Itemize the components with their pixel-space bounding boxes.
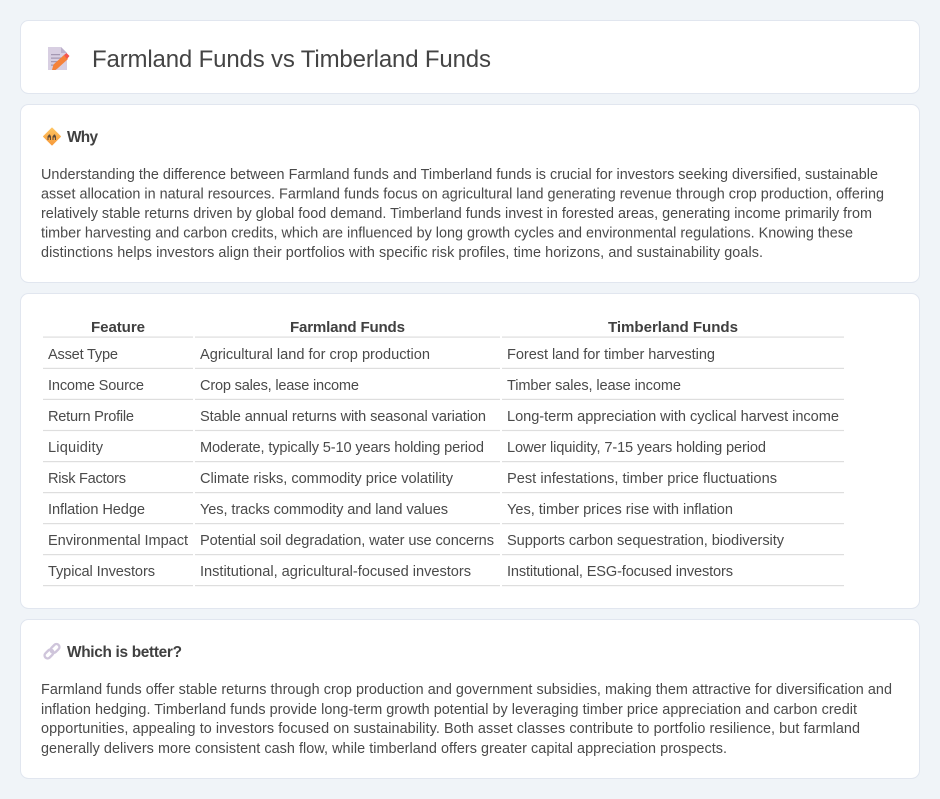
text block: which is better paragraph xyxy=(41,682,892,757)
table row: typical investors: Institutional, agricultural-focused investors xyxy=(200,564,471,580)
table row: return profile: Stable annual returns with seasonal variation xyxy=(200,409,486,425)
text block: why paragraph: Understanding the difference between Farmland funds and Timberland funds is crucial for investors seeking diversified, sustainable xyxy=(41,167,878,183)
table row: typical investors: Institutional, ESG-focused investors xyxy=(507,564,733,580)
text block: which is better paragraph: opportunities, appealing to investors focused on sustainability. Both asset classes contribute to portfolio resilience, but farmland xyxy=(41,721,860,737)
table row: liquidity: Lower liquidity, 7-15 years holding period xyxy=(507,440,766,456)
text block: why paragraph xyxy=(41,167,884,261)
table row: inflation hedge: Yes, timber prices rise with inflation xyxy=(507,502,733,518)
table row: income source xyxy=(43,378,844,400)
table row: asset type xyxy=(43,347,844,369)
table row: environmental impact: Supports carbon sequestration, biodiversity xyxy=(507,533,785,549)
table row: income source: Crop sales, lease income xyxy=(200,378,359,394)
panel: title header xyxy=(20,20,920,94)
text block: why paragraph: distinctions helps investors align their portfolios with specific risk profiles, time horizons, and sustainability goals. xyxy=(41,245,763,261)
table row: risk factors: Climate risks, commodity price volatility xyxy=(200,471,454,487)
text block: which is better paragraph: generally delivers more consistent cash flow, while timberland offers greater capital appreciation prospects. xyxy=(41,741,727,757)
heading: which is better: Which is better? xyxy=(67,644,182,661)
table row: typical investors xyxy=(43,564,844,586)
table row: return profile: Long-term appreciation with cyclical harvest income xyxy=(507,409,839,425)
table row: typical investors: Typical Investors xyxy=(48,564,155,580)
title: Farmland Funds vs Timberland Funds xyxy=(92,46,491,73)
icon: memo with pencil xyxy=(48,47,70,70)
panel: comparison table xyxy=(20,294,920,608)
table header row: Timberland Funds xyxy=(608,319,738,336)
table row: return profile xyxy=(43,409,844,431)
text block: which is better paragraph: inflation hedging. Timberland funds provide long-term growth potential by leveraging timber price appreciation and carbon credit xyxy=(41,702,857,718)
table row: liquidity: Liquidity xyxy=(48,440,104,456)
table row: environmental impact: Potential soil degradation, water use concerns xyxy=(200,533,494,549)
table row: inflation hedge: Yes, tracks commodity and land values xyxy=(200,502,448,518)
panel: which is better xyxy=(20,620,920,778)
table header row: Farmland Funds xyxy=(290,319,405,336)
text block: which is better paragraph: Farmland funds offer stable returns through crop production and government subsidies, making them attractive for diversification and xyxy=(41,682,892,698)
panel: why xyxy=(20,104,920,282)
table row: asset type: Forest land for timber harvesting xyxy=(507,347,715,363)
table row: income source: Income Source xyxy=(48,378,144,394)
table header row: Feature xyxy=(91,319,145,336)
table row: inflation hedge xyxy=(43,502,844,524)
text block: why paragraph: relatively stable returns driven by global food demand. Timberland funds invest in forested areas, generating income primarily from xyxy=(41,206,872,222)
table row: risk factors: Risk Factors xyxy=(48,471,126,487)
table row: asset type: Asset Type xyxy=(48,347,118,363)
table row: environmental impact: Environmental Impact xyxy=(48,533,188,549)
table row: return profile: Return Profile xyxy=(48,409,134,425)
table row: risk factors xyxy=(43,471,844,493)
table row: asset type: Agricultural land for crop production xyxy=(200,347,430,363)
table row: liquidity xyxy=(43,440,844,462)
table header row xyxy=(43,319,844,338)
icon: link xyxy=(43,643,61,660)
text block: why paragraph: asset allocation in natural resources. Farmland funds focus on agricultural land generating revenue through crop production, offering xyxy=(41,186,884,202)
icon: pedestrian warning diamond xyxy=(44,128,60,145)
heading: why: Why xyxy=(67,129,98,146)
table row: risk factors: Pest infestations, timber price fluctuations xyxy=(507,471,777,487)
table row: liquidity: Moderate, typically 5-10 years holding period xyxy=(200,440,484,456)
table row: inflation hedge: Inflation Hedge xyxy=(48,502,145,518)
table row: environmental impact xyxy=(43,533,844,555)
text block: why paragraph: timber harvesting and carbon credits, which are influenced by long growth cycles and environmental regulations. Knowing these xyxy=(41,226,853,242)
table row: income source: Timber sales, lease income xyxy=(507,378,681,394)
